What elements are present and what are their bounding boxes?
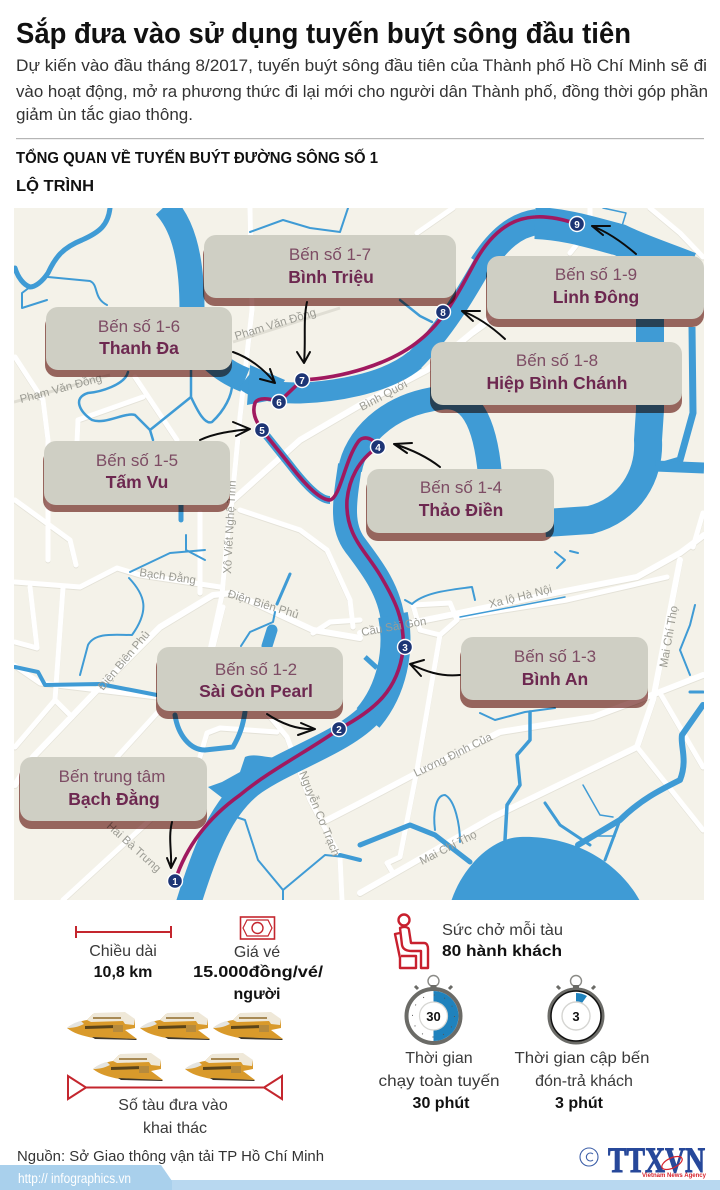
fleet stat: khai thác bbox=[143, 1120, 207, 1137]
station markers: 6 bbox=[276, 398, 282, 409]
station card 1-2 bbox=[156, 647, 343, 719]
station card 1-3: Bến số 1-3 bbox=[514, 647, 596, 666]
length stat: 10,8 km bbox=[94, 964, 152, 981]
road names: Bình Quới bbox=[358, 379, 410, 414]
station card 1-2: Bến số 1-2 bbox=[215, 660, 297, 679]
fare stat: 15.000đồng/vé/ bbox=[193, 964, 324, 981]
total time stat: Thời gian bbox=[405, 1050, 473, 1067]
station markers: 9 bbox=[574, 220, 580, 231]
station card 1-7: Bình Triệu bbox=[288, 267, 374, 287]
route map bbox=[14, 206, 704, 905]
road names: Mai Chí Thọ bbox=[658, 605, 681, 669]
station markers: 7 bbox=[299, 376, 305, 387]
icon: banknote bbox=[240, 917, 274, 939]
ferry route line bbox=[175, 217, 577, 881]
roads bbox=[14, 208, 704, 900]
road names: Nguyễn Cơ Trạch bbox=[296, 769, 342, 858]
fare stat: người bbox=[234, 986, 280, 1003]
total time stat: chạy toàn tuyến bbox=[378, 1073, 500, 1090]
station card central: Bạch Đằng bbox=[68, 788, 160, 809]
station card 1-7: Bến số 1-7 bbox=[289, 245, 371, 264]
station card 1-4 bbox=[366, 469, 554, 541]
fare stat: Giá vé bbox=[234, 944, 280, 961]
road names: Cầu Sài Gòn bbox=[360, 616, 427, 639]
station card 1-2: Sài Gòn Pearl bbox=[199, 681, 313, 701]
length stat bbox=[76, 926, 171, 981]
dock time stat bbox=[514, 976, 650, 1112]
station card 1-3: Bình An bbox=[522, 669, 588, 689]
station card 1-5: Bến số 1-5 bbox=[96, 451, 178, 470]
road names: Xô Viết Nghệ Tĩnh bbox=[222, 480, 239, 574]
station markers: 2 bbox=[336, 725, 342, 736]
icon: stopwatch 30: 30 bbox=[426, 1009, 441, 1024]
title: Sắp đưa vào sử dụng tuyến buýt sông đầu tiên bbox=[16, 16, 631, 50]
station markers: 1 bbox=[172, 877, 178, 888]
road names: Phạm Văn Đồng bbox=[233, 307, 318, 343]
intro text: vào hoạt động, mở ra phương thức đi lại mới cho người dân Thành phố, đồng thời góp phần bbox=[16, 83, 708, 101]
fleet stat: Số tàu đưa vào bbox=[118, 1097, 228, 1114]
dock time stat: Thời gian cập bến bbox=[514, 1050, 650, 1067]
dock time stat: 3 phút bbox=[555, 1095, 604, 1112]
station markers: 8 bbox=[440, 308, 446, 319]
station card 1-8: Hiệp Bình Chánh bbox=[487, 373, 627, 393]
footer band: http:// infographics.vn bbox=[18, 1171, 131, 1186]
copyright symbol bbox=[580, 1148, 598, 1166]
station card 1-9: Linh Đông bbox=[553, 287, 639, 307]
road names: Bạch Đằng bbox=[139, 566, 197, 587]
station card 1-6: Bến số 1-6 bbox=[98, 317, 180, 336]
station card 1-4: Thảo Điền bbox=[419, 500, 503, 520]
road names: Điện Biên Phủ bbox=[226, 588, 300, 621]
station card 1-8: Bến số 1-8 bbox=[516, 351, 598, 370]
capacity stat: 80 hành khách bbox=[442, 943, 562, 960]
station card 1-5: Tấm Vu bbox=[106, 472, 168, 492]
minor road labels lines bbox=[14, 308, 340, 402]
station card 1-8 bbox=[430, 342, 682, 413]
intro text: Dự kiến vào đầu tháng 8/2017, tuyến buýt sông đầu tiên của Thành phố Hồ Chí Minh sẽ đi bbox=[16, 57, 707, 75]
station markers bbox=[168, 216, 584, 888]
icon: seated passenger bbox=[395, 914, 428, 968]
road names: Phạm Văn Đồng bbox=[19, 372, 103, 406]
station markers: 5 bbox=[259, 426, 265, 437]
road names bbox=[19, 307, 681, 875]
intro text bbox=[16, 57, 708, 124]
icon: boats bbox=[67, 1012, 283, 1081]
road names: Lương Định Của bbox=[412, 731, 495, 780]
station markers: 4 bbox=[375, 443, 381, 454]
station card central bbox=[19, 757, 207, 829]
fleet stat bbox=[67, 1012, 283, 1137]
road names: Xa lộ Hà Nội bbox=[488, 584, 553, 611]
arrows bbox=[167, 226, 636, 868]
station card 1-6: Thanh Đa bbox=[99, 338, 179, 358]
footer band bbox=[0, 1165, 720, 1190]
station card 1-3 bbox=[460, 637, 648, 708]
station markers: 3 bbox=[402, 643, 408, 654]
fare stat bbox=[193, 917, 324, 1003]
station card central: Bến trung tâm bbox=[59, 767, 165, 786]
waterways bbox=[15, 208, 703, 900]
station card 1-4: Bến số 1-4 bbox=[420, 478, 502, 497]
source: Nguồn: Sở Giao thông vận tải TP Hồ Chí Minh bbox=[17, 1148, 324, 1165]
road names: Điện Biên Phủ bbox=[96, 629, 153, 693]
station card 1-9: Bến số 1-9 bbox=[555, 265, 637, 284]
road names: Hai Bà Trưng bbox=[104, 820, 163, 875]
capacity stat: Sức chở mỗi tàu bbox=[442, 920, 563, 939]
capacity stat bbox=[395, 914, 563, 968]
length stat: Chiều dài bbox=[89, 943, 157, 960]
dock time stat: đón-trả khách bbox=[535, 1073, 633, 1090]
icon: stopwatch 3: 3 bbox=[572, 1009, 580, 1024]
section heading: TỔNG QUAN VỀ TUYẾN BUÝT ĐƯỜNG SÔNG SỐ 1 bbox=[16, 147, 378, 167]
intro text: giảm ùn tắc giao thông. bbox=[16, 105, 193, 124]
road names: Mai Chí Thọ bbox=[418, 829, 479, 868]
station card 1-7 bbox=[203, 235, 456, 306]
total time stat: 30 phút bbox=[413, 1095, 470, 1112]
station card 1-6 bbox=[45, 307, 232, 377]
route subheading: LỘ TRÌNH bbox=[16, 176, 94, 195]
TTXVN logo: Vietnam News Agency bbox=[642, 1173, 707, 1179]
station card 1-9 bbox=[486, 256, 704, 327]
total time stat bbox=[378, 976, 500, 1112]
rivers bbox=[165, 206, 704, 905]
station card 1-5 bbox=[43, 441, 230, 512]
